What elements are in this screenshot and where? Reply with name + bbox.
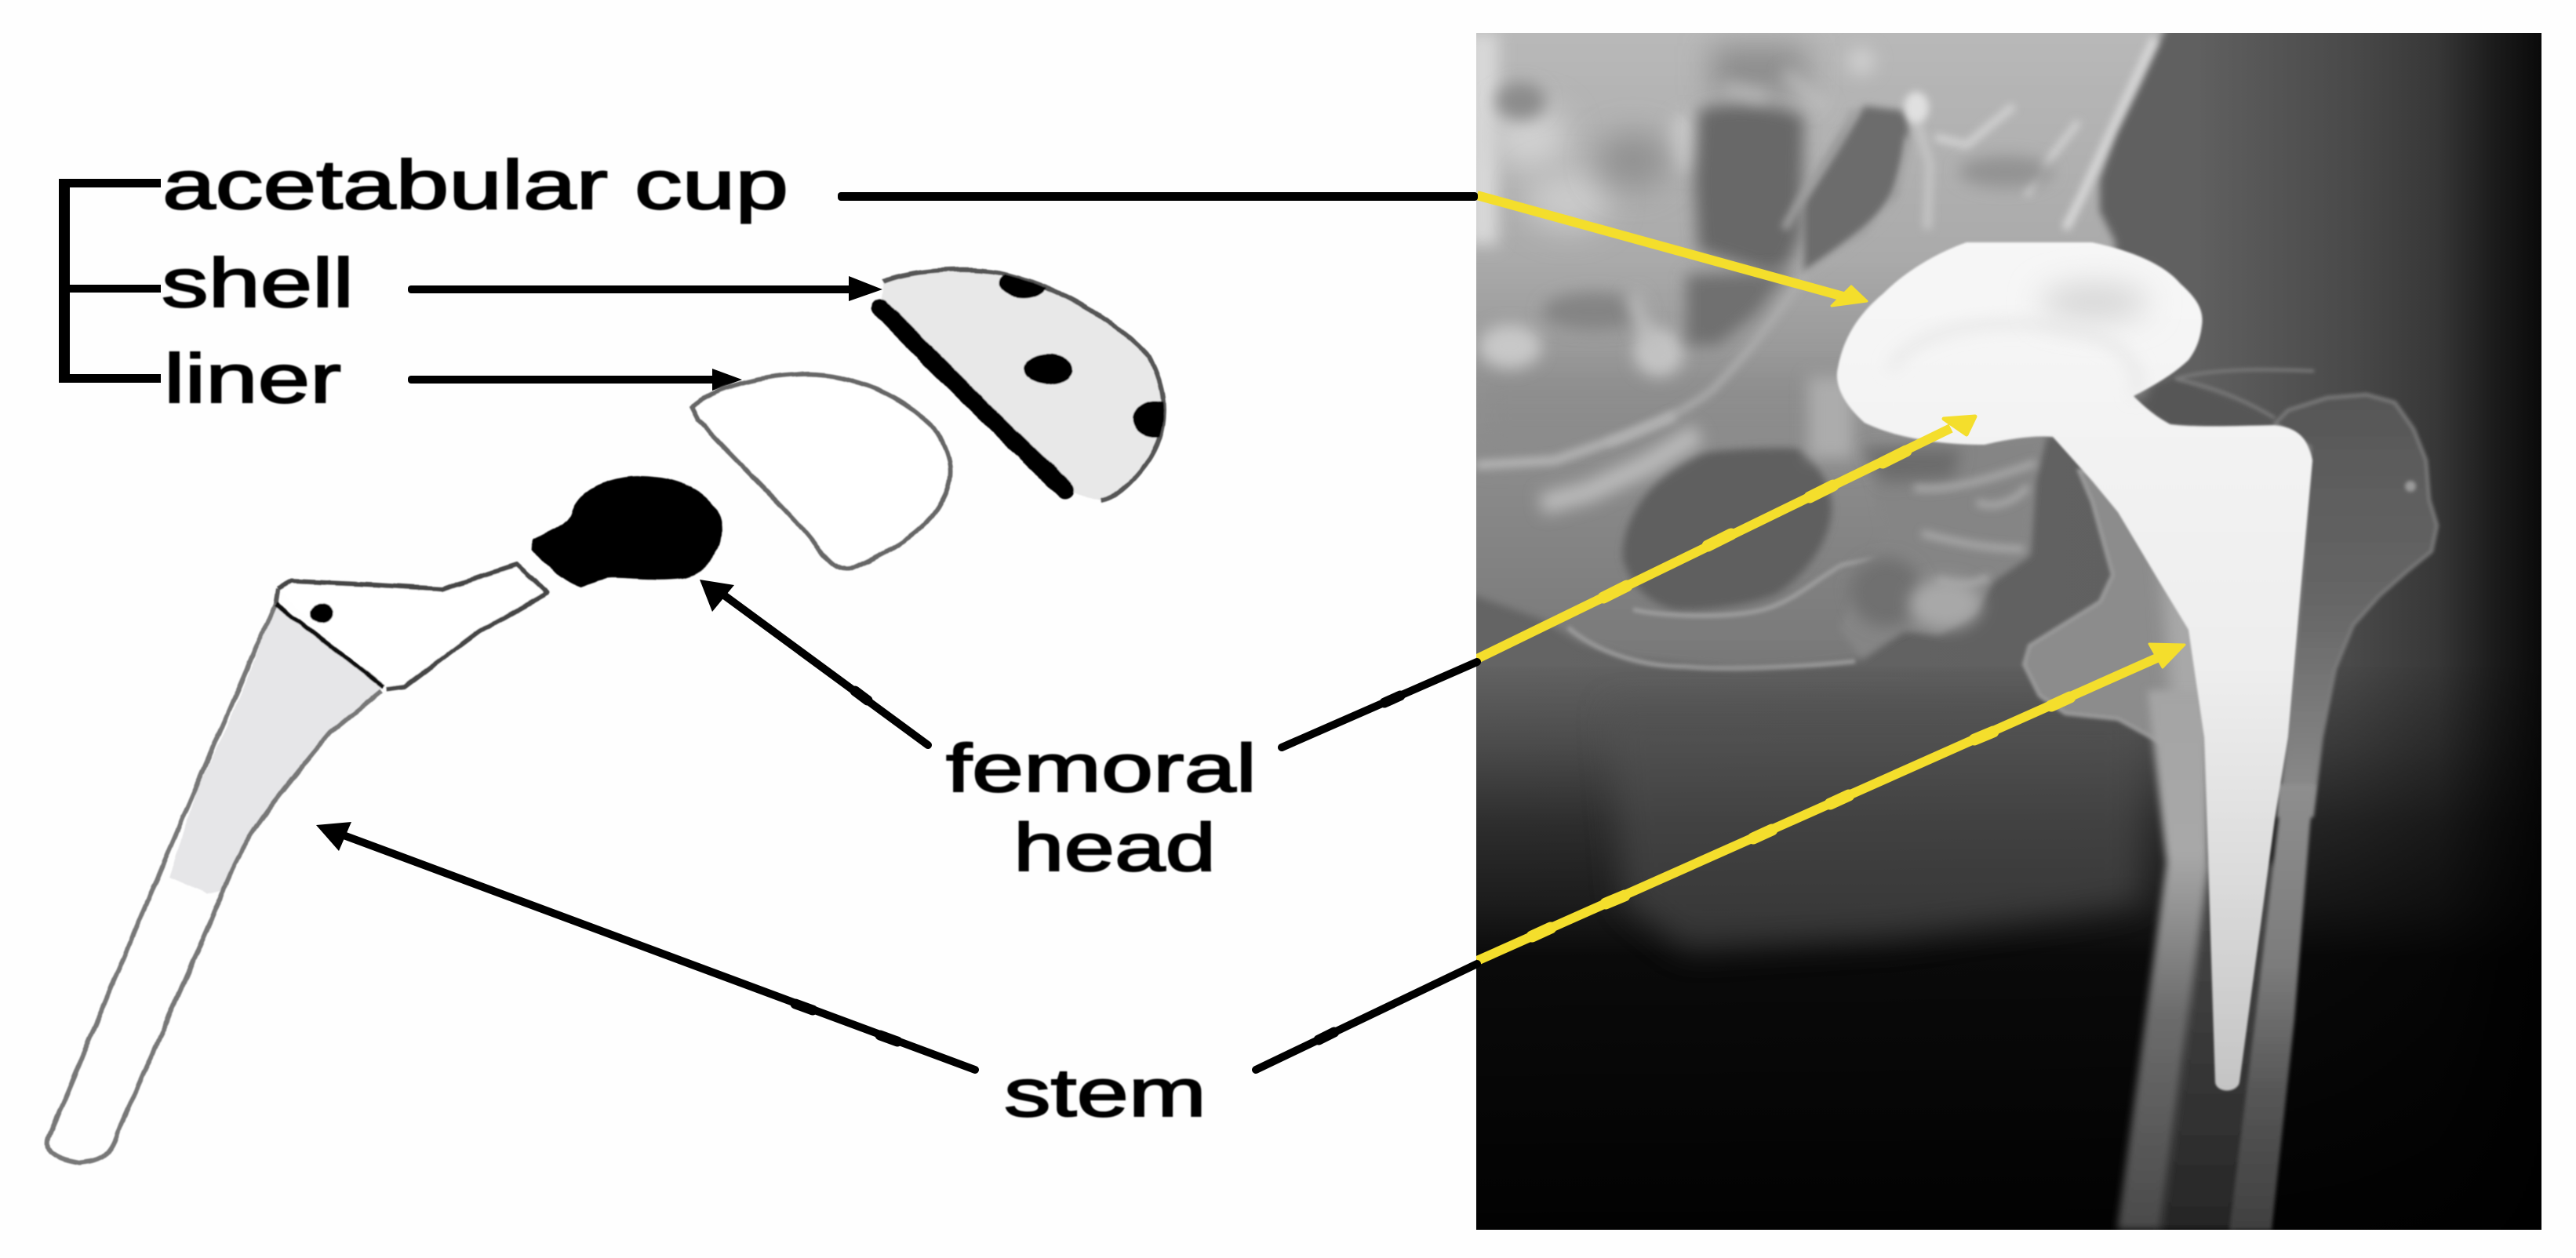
neck shadow and lines [2138, 382, 2210, 424]
line: stem to x-ray [1256, 964, 1477, 1070]
liner component [692, 374, 950, 569]
femoral head component [532, 476, 722, 587]
pelvic streaks [1785, 110, 1855, 229]
thigh soft tissue [1613, 758, 2149, 961]
line: femoral head to x-ray [1282, 662, 1477, 747]
bracket grouping cup parts [59, 179, 161, 383]
arrow: shell [408, 276, 882, 301]
shell component [880, 270, 1177, 500]
lesser trochanter [2021, 467, 2178, 743]
label: liner: liner [164, 340, 341, 417]
lower fade to black [1476, 667, 2541, 1230]
greater trochanter [2275, 394, 2437, 816]
yellow arrow: femoral head [1477, 416, 1975, 659]
label: stem: stem [1004, 1056, 1206, 1131]
iliac dark cavities [1694, 104, 1804, 275]
label: acetabular cup: acetabular cup [162, 146, 788, 224]
arrow: stem [316, 822, 975, 1070]
yellow arrow: acetabular cup [1477, 195, 1867, 306]
label: shell: shell [162, 244, 354, 322]
label: head: head [1013, 810, 1216, 885]
femoral stem component [48, 565, 548, 1163]
femur shaft [2117, 690, 2316, 1230]
pelvis bone [1459, 16, 2171, 669]
line: acetabular cup to x-ray [838, 192, 1478, 201]
x-ray background [1476, 33, 2541, 1230]
ischium [1846, 442, 2035, 658]
arrow: femoral head [700, 580, 928, 745]
bone arcs around the foramen [1476, 416, 1675, 465]
prosthesis in x-ray [1837, 242, 2312, 1090]
arrow: liner [408, 369, 742, 391]
obturator foramen [1623, 448, 1832, 610]
x-ray panel [1459, 16, 2541, 1230]
label: femoral: femoral [946, 731, 1257, 806]
yellow arrow: stem [1477, 644, 2185, 961]
